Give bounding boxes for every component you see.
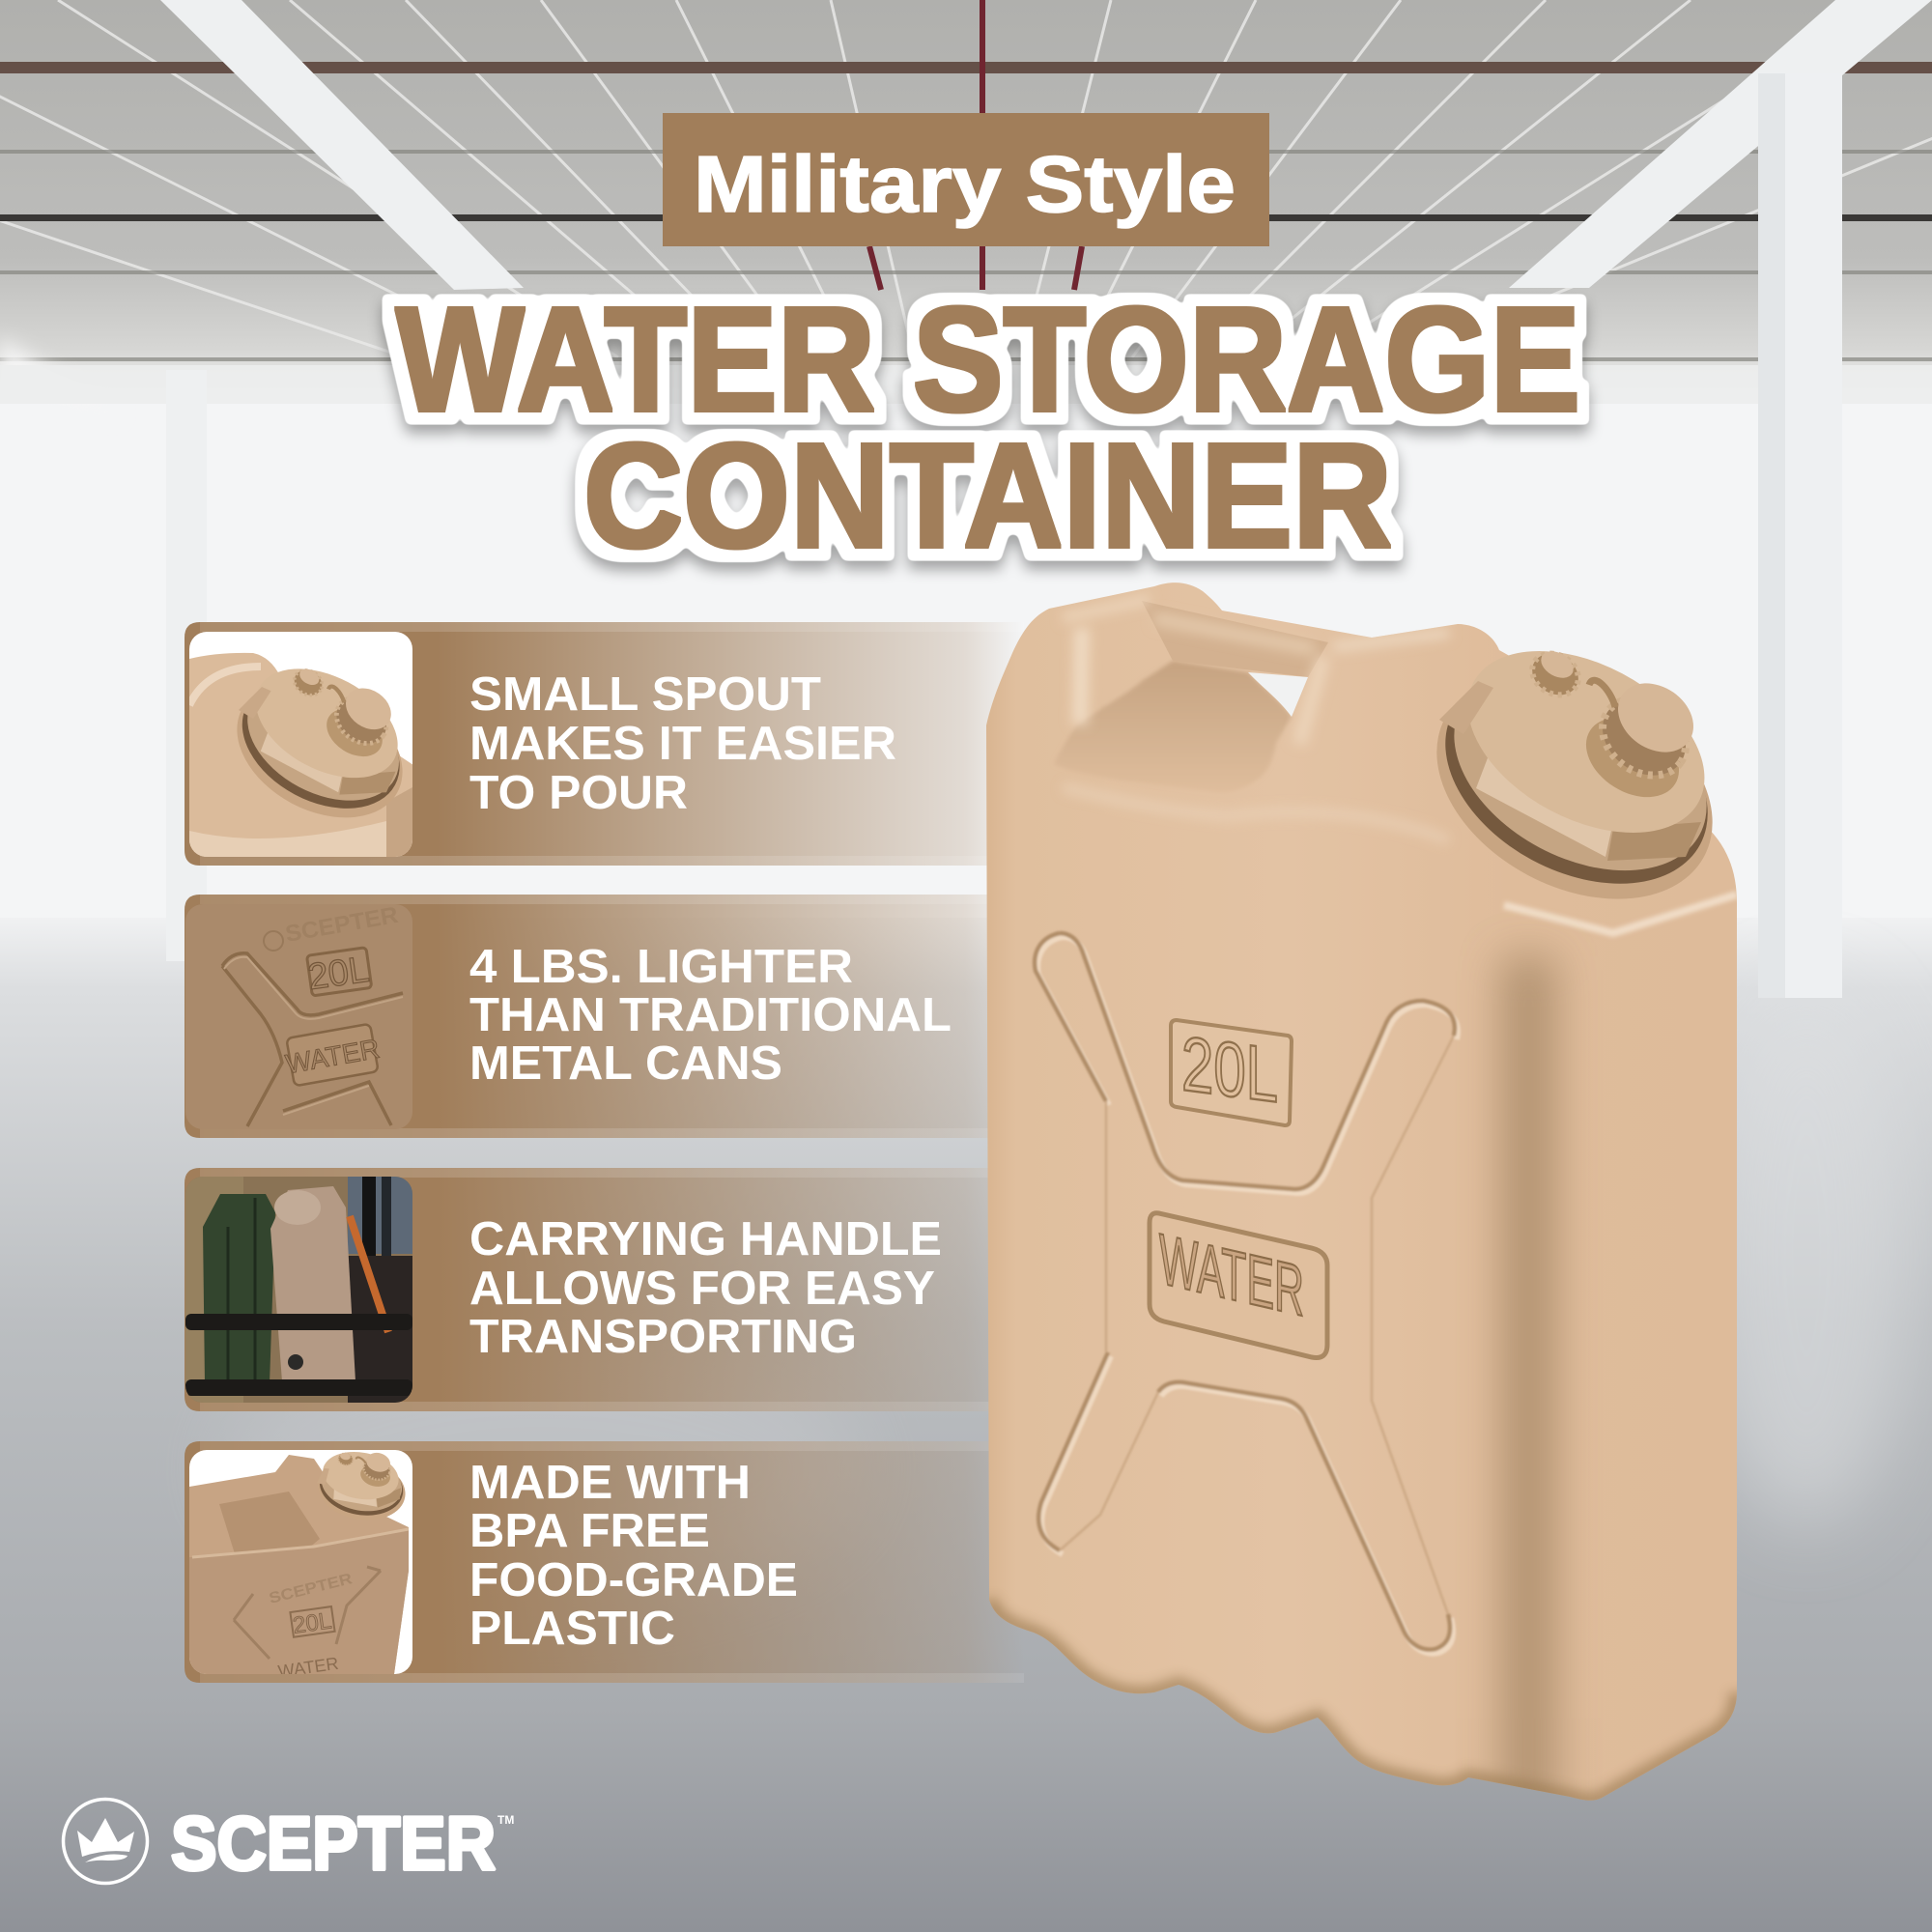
text: carrying handle: ALLOWS FOR EASY [469, 1263, 935, 1315]
text: BPA free plastic [469, 1457, 798, 1655]
icon: angled jug photo: WATER [277, 1654, 340, 1681]
icon: crown in circle [64, 1799, 147, 1884]
panel: small spout [185, 622, 1024, 866]
text: BPA free plastic: BPA FREE [469, 1505, 710, 1557]
trademark: TM [497, 1813, 514, 1827]
embossed label: WATER: WATER [1159, 1218, 1304, 1331]
badge: Military Style [663, 113, 1269, 246]
icon: angled jug photo [189, 1450, 412, 1674]
icon: embossed jug face photo: 20L [305, 950, 372, 998]
text: small spout: MAKES IT EASIER [469, 718, 896, 770]
title: Water Storage Container [396, 276, 1580, 579]
logo: Scepter [64, 1799, 514, 1886]
icon: embossed jug face photo: WATER [283, 1034, 382, 1079]
panel: lighter weight [185, 895, 1024, 1138]
text: carrying handle [469, 1213, 942, 1363]
title: Water Storage Container: CONTAINER [583, 412, 1392, 579]
panel: BPA free plastic [185, 1424, 1024, 1683]
icon: angled jug photo: 20L [292, 1607, 333, 1639]
title: Water Storage Container: WATER STORAGE [396, 276, 1580, 442]
text: small spout: SMALL SPOUT [469, 668, 821, 721]
icon: spout cap close-up photo [189, 632, 426, 857]
panel: carrying handle [185, 1168, 1024, 1411]
text: lighter weight: 4 LBS. LIGHTER [469, 941, 853, 993]
icon: angled jug photo: SCEPTER [268, 1571, 355, 1607]
text: small spout: TO POUR [469, 767, 688, 819]
embossed X pattern [1035, 933, 1458, 1654]
text: lighter weight [469, 941, 952, 1090]
text: small spout [469, 668, 896, 819]
handle opening [1248, 672, 1308, 717]
text: BPA free plastic: FOOD-GRADE [469, 1554, 798, 1606]
text: carrying handle: TRANSPORTING [469, 1311, 857, 1363]
badge: Military Style: Military Style [694, 139, 1236, 229]
icon: embossed jug face photo: SCEPTER [283, 902, 400, 948]
text: lighter weight: THAN TRADITIONAL [469, 989, 952, 1041]
icon: embossed jug face photo [185, 902, 412, 1129]
text: carrying handle: CARRYING HANDLE [469, 1213, 942, 1265]
embossed label: 20L: 20L [1181, 1020, 1278, 1120]
text: BPA free plastic: MADE WITH [469, 1457, 751, 1509]
embossed label: WATER [1150, 1213, 1327, 1357]
text: lighter weight: METAL CANS [469, 1037, 782, 1090]
jug cap and spout [1398, 613, 1751, 944]
text: BPA free plastic: PLASTIC [469, 1603, 675, 1655]
product: tan water jug [986, 582, 1751, 1826]
wordmark: SCEPTER [171, 1801, 496, 1886]
icon: cans on truck rack photo [185, 1177, 412, 1403]
